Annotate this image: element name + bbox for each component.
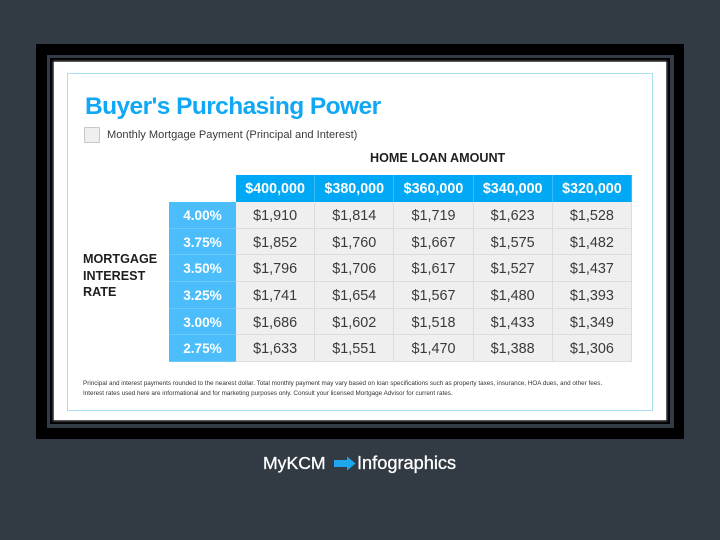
rate table: $1,482 bbox=[570, 235, 614, 251]
rate table: $1,349 bbox=[570, 315, 614, 331]
rate table: $1,667 bbox=[411, 235, 455, 251]
frame inner band bbox=[47, 55, 674, 428]
footnote bbox=[83, 380, 602, 396]
rate table: $320,000 bbox=[562, 181, 622, 197]
rate table: $1,760 bbox=[332, 235, 376, 251]
rate table: $1,706 bbox=[332, 261, 376, 277]
rate table: $1,388 bbox=[491, 341, 535, 357]
caption: MyKCM: MyKCM bbox=[263, 453, 326, 473]
axis heading: mortgage interest rate bbox=[83, 252, 157, 299]
rate table: $1,910 bbox=[253, 208, 297, 224]
rate table: 3.25% bbox=[183, 288, 222, 303]
rate table: 3.50% bbox=[183, 261, 222, 276]
rate table: $400,000 bbox=[245, 181, 305, 197]
rate table: $1,575 bbox=[491, 235, 535, 251]
rate table: $1,480 bbox=[491, 288, 535, 304]
axis heading: mortgage interest rate: MORTGAGE bbox=[83, 252, 157, 266]
legend label: Monthly Mortgage Payment (Principal and Interest) bbox=[107, 129, 357, 141]
rate table: $1,602 bbox=[332, 315, 376, 331]
caption: Infographics: Infographics bbox=[357, 453, 456, 473]
rate table: $1,852 bbox=[253, 235, 297, 251]
rate table: $1,719 bbox=[411, 208, 455, 224]
legend swatch bbox=[84, 127, 100, 143]
rate table: 3.75% bbox=[183, 235, 222, 250]
footnote: Interest rates used here are informational and for marketing purposes only. Consult your licensed Mortgage Advisor for current rates. bbox=[83, 390, 453, 396]
rate table: $1,470 bbox=[411, 341, 455, 357]
rate table: $1,306 bbox=[570, 341, 614, 357]
rate table: $1,617 bbox=[411, 261, 455, 277]
rate table: $1,518 bbox=[411, 315, 455, 331]
title: Buyer's Purchasing Power bbox=[85, 93, 381, 120]
white infographic card bbox=[54, 62, 666, 420]
rate table bbox=[169, 175, 632, 362]
rate table: $1,814 bbox=[332, 208, 376, 224]
footnote: Principal and interest payments rounded to the nearest dollar. Total monthly payment may vary based on loan specifications such as property taxes, insurance, HOA dues, and other fees. bbox=[83, 380, 602, 387]
rate table: $1,433 bbox=[491, 315, 535, 331]
icon: arrow bbox=[334, 456, 356, 470]
rate table: $340,000 bbox=[483, 181, 542, 197]
picture frame bbox=[36, 44, 684, 439]
rate table: $380,000 bbox=[324, 181, 384, 197]
rate table: $1,567 bbox=[411, 288, 455, 304]
rate table: 3.00% bbox=[183, 315, 222, 330]
rate table: $1,623 bbox=[491, 208, 535, 224]
rate table: 2.75% bbox=[183, 341, 222, 356]
rate table: $1,654 bbox=[332, 288, 376, 304]
rate table: $1,796 bbox=[253, 261, 297, 277]
rate table: $1,437 bbox=[570, 261, 614, 277]
rate table: $360,000 bbox=[404, 181, 463, 197]
rate table: $1,686 bbox=[253, 315, 297, 331]
axis heading: mortgage interest rate: INTEREST bbox=[83, 269, 145, 283]
axis heading: mortgage interest rate: RATE bbox=[83, 285, 116, 299]
axis heading: home loan amount: HOME LOAN AMOUNT bbox=[370, 151, 505, 165]
rate table: $1,633 bbox=[253, 341, 297, 357]
rate table: $1,551 bbox=[332, 341, 376, 357]
rate table: $1,741 bbox=[253, 288, 297, 304]
rate table: $1,393 bbox=[570, 288, 614, 304]
rate table: $1,528 bbox=[570, 208, 614, 224]
card light blue border bbox=[67, 73, 653, 411]
rate table: $1,527 bbox=[491, 261, 535, 277]
rate table: 4.00% bbox=[183, 208, 222, 223]
